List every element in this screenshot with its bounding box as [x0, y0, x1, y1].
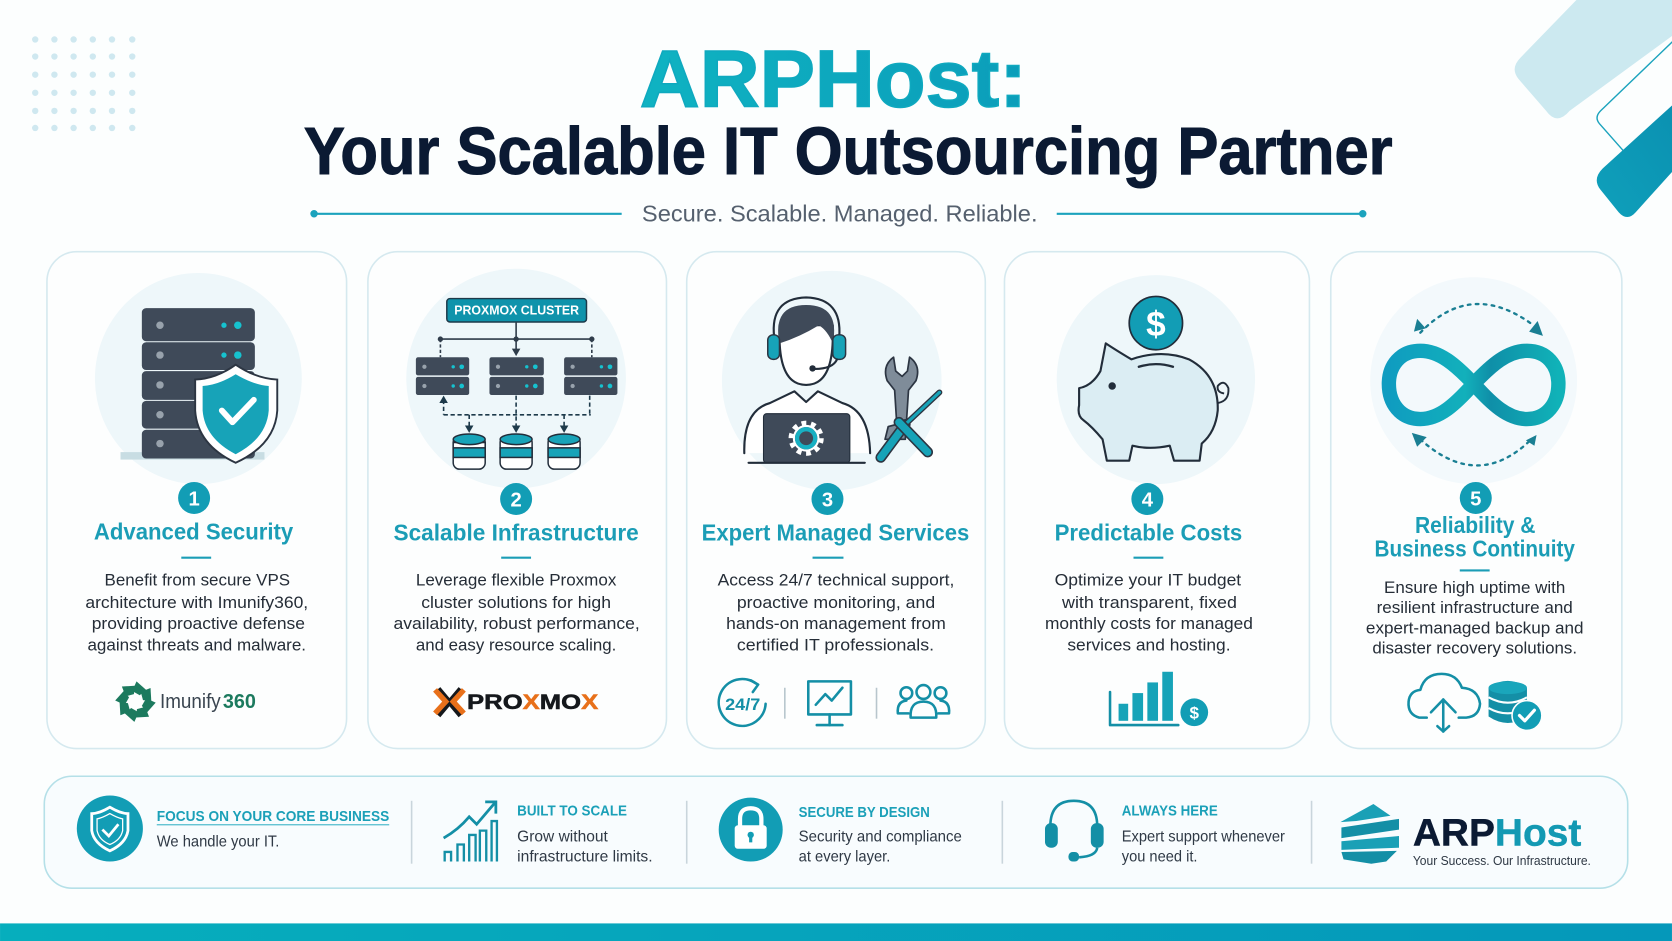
text block: Optimize your IT budget [1055, 570, 1241, 589]
number badge 5 [1460, 482, 1492, 514]
tagline with rules [310, 200, 1366, 226]
icon: bar chart with dollar [1110, 672, 1208, 726]
text block [718, 570, 954, 654]
cluster label: PROXMOX CLUSTER [454, 303, 579, 318]
text block: Access 24/7 technical support, [718, 570, 954, 589]
icon: bar chart with dollar: $ [1190, 704, 1200, 723]
icon: piggy bank with coin [1079, 296, 1228, 461]
icon: piggy bank with coin: $ [1146, 305, 1166, 344]
item: focus on core business: FOCUS ON YOUR CORE BUSINESS [157, 808, 389, 825]
panel: scalable infrastructure [368, 252, 666, 749]
text block [1366, 578, 1583, 658]
panel: advanced security [47, 252, 347, 749]
title: Your Scalable IT Outsourcing Partner [304, 114, 1393, 189]
text block: with transparent, fixed [1061, 593, 1237, 612]
item: always here: Expert support whenever [1122, 828, 1285, 845]
item: secure by design: SECURE BY DESIGN [799, 804, 930, 821]
text block: architecture with Imunify360, [85, 593, 308, 612]
item: built to scale: infrastructure limits. [517, 849, 653, 866]
icon row: 24/7, monitoring, team: 24/7 [725, 695, 760, 714]
cluster label [447, 299, 586, 322]
item: always here [1045, 801, 1285, 866]
screwdriver [881, 424, 905, 457]
heading: Scalable Infrastructure [393, 520, 639, 546]
logo: Imunify360: Imunify [160, 691, 222, 713]
text block: disaster recovery solutions. [1372, 639, 1577, 658]
item: built to scale [444, 802, 653, 866]
number badge 1 [178, 482, 210, 514]
text block: services and hosting. [1067, 635, 1231, 654]
title [304, 35, 1393, 189]
footer band [0, 923, 1672, 941]
panel: expert managed services [687, 252, 985, 749]
item: always here: ALWAYS HERE [1122, 803, 1218, 820]
item: secure by design: Security and compliance [799, 828, 962, 845]
text block: certified IT professionals. [737, 635, 934, 654]
item: secure by design [719, 798, 962, 866]
heading: Predictable Costs [1055, 520, 1242, 546]
item: built to scale: BUILT TO SCALE [517, 803, 627, 820]
icon: server with shield [121, 308, 277, 463]
text block: monthly costs for managed [1045, 614, 1253, 633]
item: focus on core business: We handle your IT. [157, 834, 279, 851]
icon: proxmox cluster diagram [416, 299, 617, 469]
panel: predictable costs [1004, 252, 1309, 749]
text block: Ensure high uptime with [1384, 578, 1565, 597]
text block: hands-on management from [726, 614, 946, 633]
text block: availability, robust performance, [393, 614, 640, 633]
logo: Imunify360 [114, 680, 256, 723]
item: focus on core business [77, 795, 389, 862]
wrench [885, 357, 918, 439]
logo: Proxmox: PRO XMO X [467, 690, 599, 714]
item: secure by design: at every layer. [799, 849, 890, 866]
number badge 4 [1131, 483, 1163, 515]
decorative dot grid [32, 36, 135, 131]
title: ARPHost: [640, 35, 1027, 125]
heading: Expert Managed Services [702, 520, 969, 546]
text block: Leverage flexible Proxmox [416, 570, 617, 589]
heading: Advanced Security [94, 519, 293, 545]
number badge 3 [811, 483, 843, 515]
text block [393, 570, 640, 654]
logo: ARPHost: ARPHost [1413, 812, 1582, 855]
number badge 4: 4 [1142, 489, 1154, 511]
text block: Benefit from secure VPS [105, 570, 290, 589]
icon: support technician with tools [744, 297, 939, 463]
icon: infinity loop with arrows [1389, 304, 1558, 465]
text block: expert-managed backup and [1366, 618, 1583, 637]
number badge 3: 3 [822, 489, 833, 511]
text block [85, 570, 308, 654]
text block: and easy resource scaling. [416, 635, 616, 654]
text block: cluster solutions for high [421, 593, 611, 612]
text block: against threats and malware. [87, 635, 306, 654]
item: always here: you need it. [1122, 849, 1197, 866]
panel: reliability and business continuity [1331, 252, 1622, 749]
logo: ARPHost: Your Success. Our Infrastructure. [1413, 853, 1591, 868]
heading: Reliability & [1415, 512, 1536, 538]
number badge 1: 1 [188, 488, 200, 510]
icon row: 24/7, monitoring, team [719, 679, 949, 726]
logo: Imunify360: 360 [223, 691, 256, 713]
text block: resilient infrastructure and [1377, 598, 1573, 617]
number badge 2 [500, 483, 532, 515]
database trio [453, 434, 580, 469]
tagline with rules: Secure. Scalable. Managed. Reliable. [642, 200, 1038, 226]
item: built to scale: Grow without [517, 828, 609, 845]
heading: Business Continuity [1374, 536, 1575, 562]
text block: providing proactive defense [92, 614, 305, 633]
logo: ARPHost [1340, 804, 1591, 868]
number badge 5: 5 [1470, 488, 1481, 510]
text block: proactive monitoring, and [737, 593, 935, 612]
text block [1045, 570, 1253, 654]
heading [1374, 512, 1575, 562]
icons: cloud upload and database check [1409, 674, 1542, 731]
number badge 2: 2 [510, 489, 522, 511]
decorative corner bands [1515, 0, 1672, 217]
panel: benefits bar [44, 776, 1628, 888]
